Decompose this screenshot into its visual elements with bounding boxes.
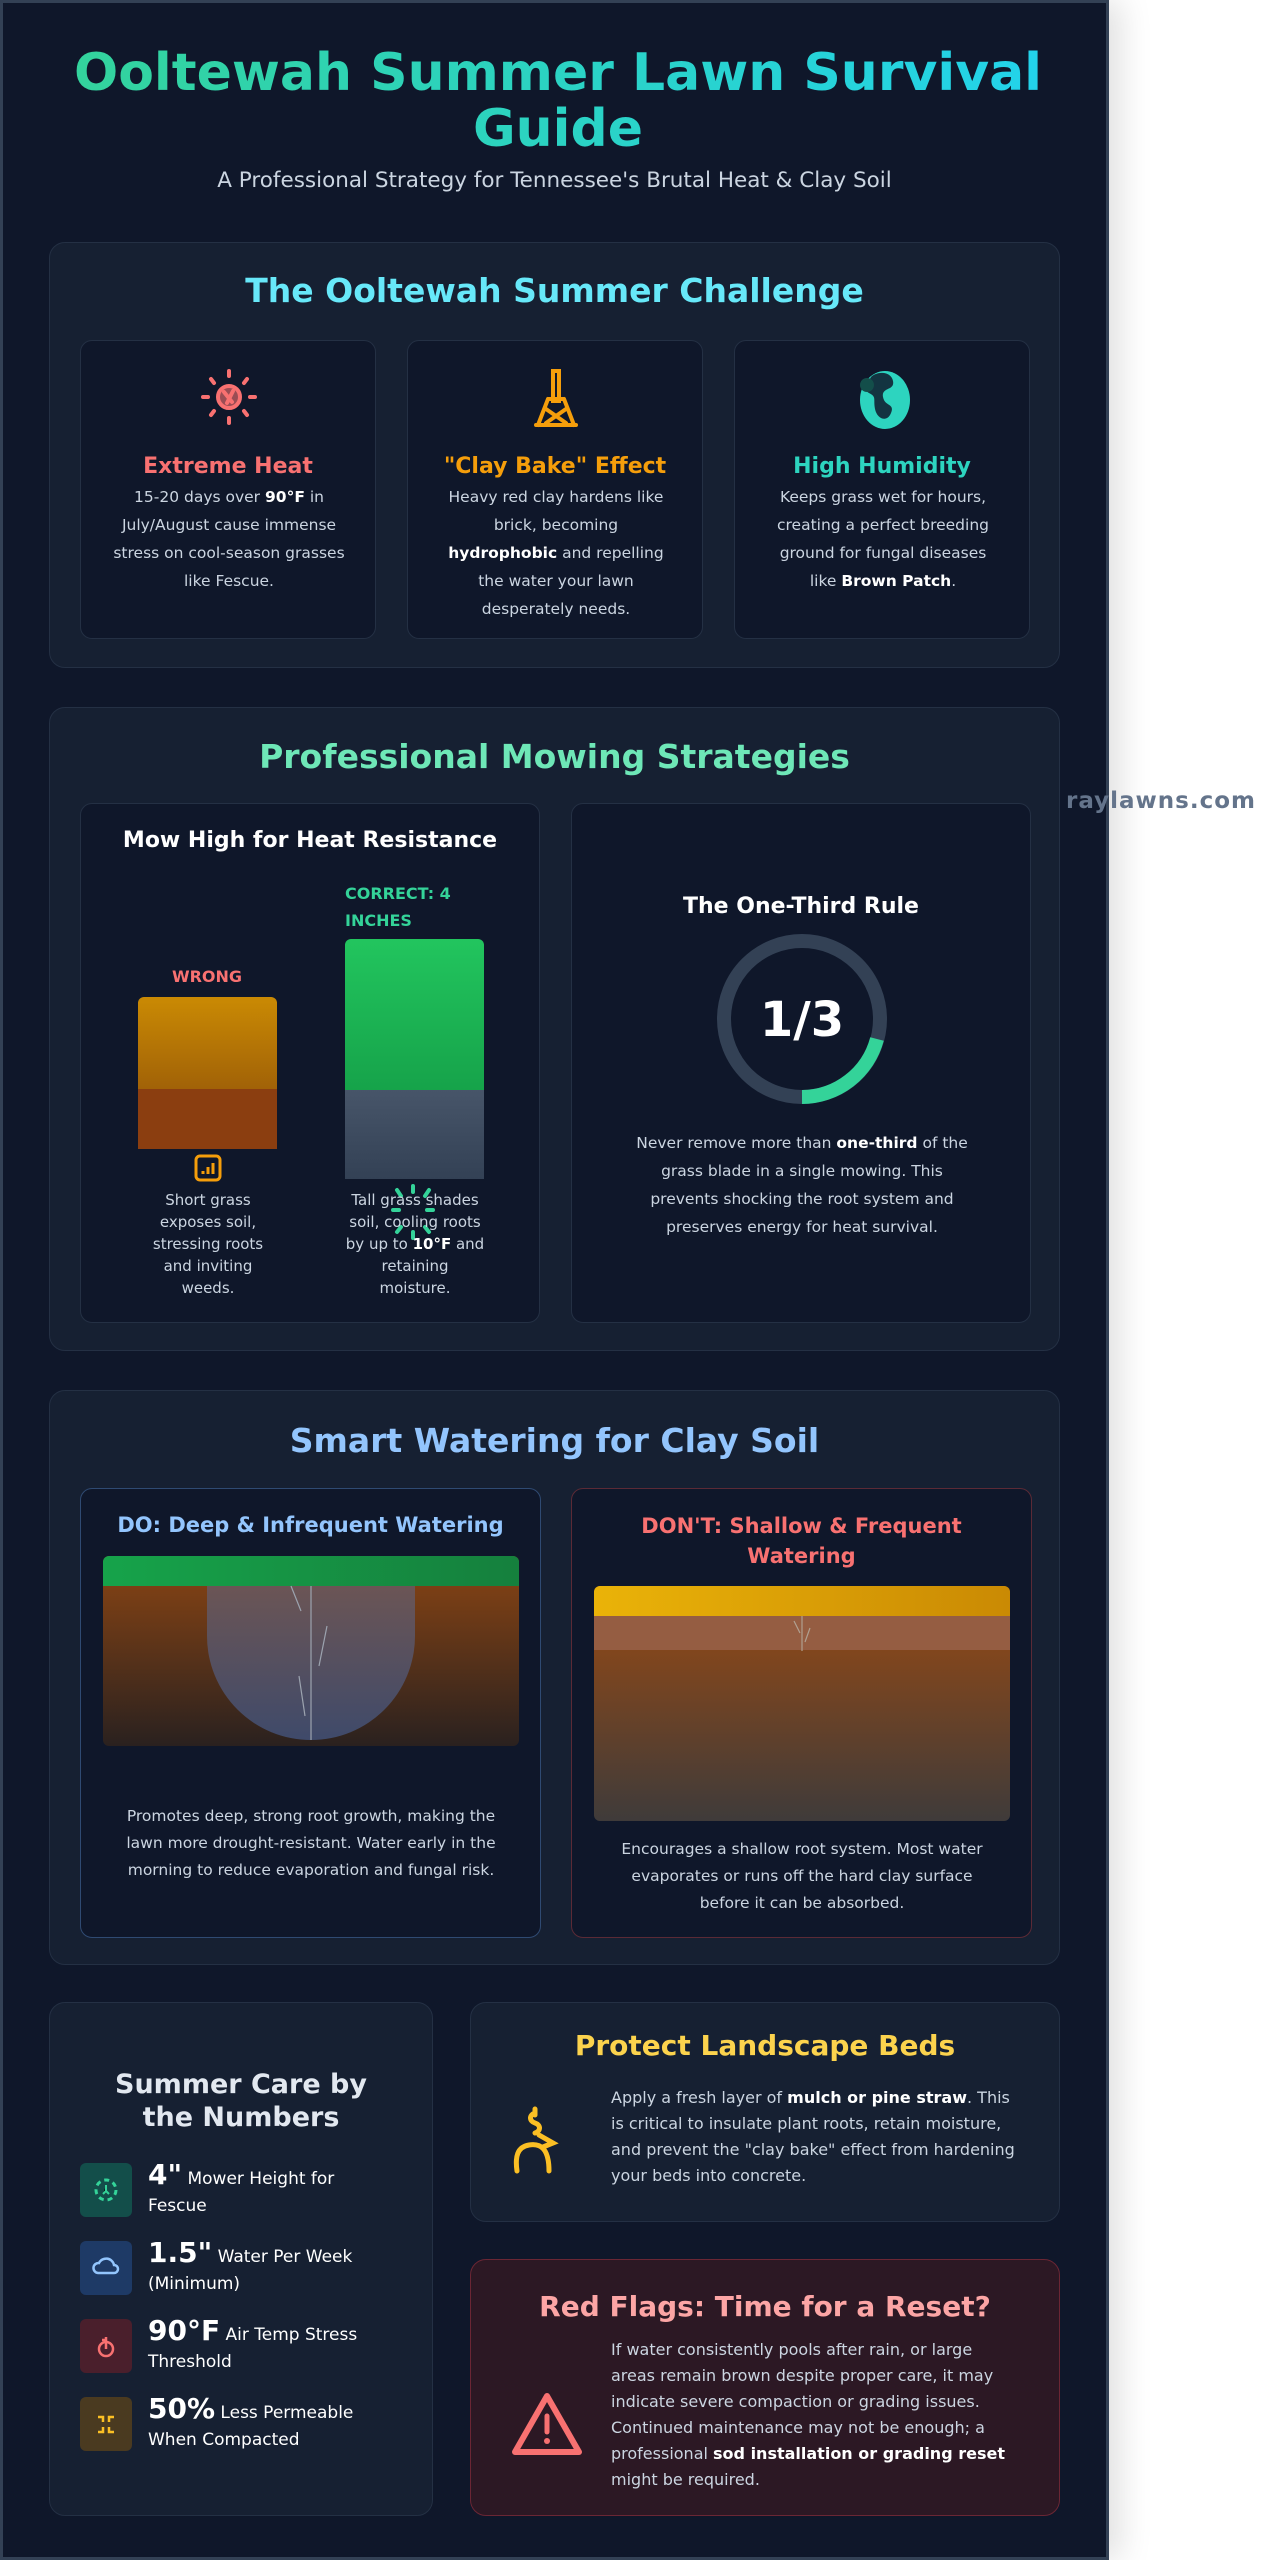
- icon: mower: [80, 2163, 132, 2217]
- stat text: 90°F Air Temp Stress Threshold: [148, 2314, 357, 2372]
- stat text: 1.5" Water Per Week (Minimum): [148, 2236, 352, 2294]
- card: extreme heat: [80, 340, 376, 639]
- icon: cooling spinner: [391, 1184, 435, 1240]
- card title: The One-Third Rule: [683, 894, 919, 919]
- text: one third: Never remove more than one-third of the grass blade in a single mowing. This prevents shocking the root system and preserves energy for heat survival.: [636, 1134, 968, 1236]
- title: Ooltewah Summer Lawn Survival Guide: [74, 43, 1042, 159]
- donut chart: [717, 934, 887, 1104]
- stat text: 50% Less Permeable When Compacted: [148, 2392, 353, 2450]
- stat text: 4" Mower Height for Fescue: [148, 2158, 334, 2216]
- card: clay bake: [407, 340, 703, 639]
- card title: DO: Deep & Infrequent Watering: [117, 1513, 504, 1537]
- panel: numbers: [49, 2002, 433, 2516]
- panel: protect beds: [470, 2002, 1060, 2222]
- text: dont: Encourages a shallow root system. Most water evaporates or runs off the hard clay surface before it can be absorbed.: [621, 1840, 983, 1912]
- text: do: Promotes deep, strong root growth, making the lawn more drought-resistant. Water early in the morning to reduce evaporation and fungal risk.: [126, 1807, 496, 1879]
- icon: globe: [860, 371, 910, 429]
- label: correct: CORRECT: 4 INCHES: [345, 884, 451, 930]
- card title: High Humidity: [793, 454, 971, 479]
- heading: numbers: Summer Care by: [115, 2069, 367, 2100]
- stat: temp: [80, 2314, 357, 2373]
- card: dont: [571, 1488, 1032, 1938]
- heading: challenge: The Ooltewah Summer Challenge: [245, 271, 864, 310]
- bar: tall grass: [345, 939, 484, 1179]
- card title: DON'T: Shallow & Frequent Watering: [641, 1514, 962, 1568]
- card text: 15-20 days over 90°F in July/August cause immense stress on cool-season grasses like Fescue.: [113, 488, 345, 590]
- watermark: raylawns.com: [1066, 788, 1256, 814]
- heading: protect: Protect Landscape Beds: [575, 2029, 955, 2062]
- panel: red flags: [470, 2259, 1060, 2516]
- card text: Heavy red clay hardens like brick, becoming hydrophobic and repelling the water your lawn desperately needs.: [448, 488, 664, 618]
- text: protect: Apply a fresh layer of mulch or pine straw. This is critical to insulate plant roots, retain moisture, and prevent the "clay bake" effect from hardening your beds into concrete.: [611, 2088, 1015, 2185]
- panel: mowing: [49, 707, 1060, 1351]
- text: red flags: If water consistently pools after rain, or large areas remain brown despite proper care, it may indicate severe compaction or grading issues. Continued maintenance may not be enough; a professional sod installation or grading reset might be required.: [611, 2340, 1005, 2489]
- card: humidity: [734, 340, 1030, 639]
- heading: red flags: Red Flags: Time for a Reset?: [539, 2290, 991, 2323]
- icon: chart: [194, 1154, 222, 1182]
- card title: Extreme Heat: [143, 454, 313, 479]
- heading: mowing: Professional Mowing Strategies: [259, 737, 850, 776]
- card title: Mow High for Heat Resistance: [123, 828, 497, 853]
- icon: tower: [534, 369, 578, 428]
- text: tall: Tall grass shades soil, cooling roots by up to 10°F and retaining moisture.: [346, 1191, 484, 1297]
- card: do: [80, 1488, 541, 1938]
- icon: sun: [201, 369, 257, 425]
- heading: numbers: the Numbers: [143, 2102, 339, 2133]
- icon: plant: [514, 2106, 559, 2174]
- bar: short grass: [138, 997, 277, 1149]
- icon: cloud: [80, 2241, 132, 2295]
- icon: warning: [512, 2393, 582, 2455]
- panel: summer challenge: [49, 242, 1060, 668]
- card text: Keeps grass wet for hours, creating a perfect breeding ground for fungal diseases like Brown Patch.: [777, 488, 989, 590]
- heading: watering: Smart Watering for Clay Soil: [290, 1421, 819, 1460]
- donut chart: 1/3: [760, 992, 844, 1048]
- panel: watering: [49, 1390, 1060, 1965]
- card: mow high: [80, 803, 540, 1323]
- icon: compress: [80, 2397, 132, 2451]
- icon: thermometer: [80, 2319, 132, 2373]
- card: one third: [571, 803, 1031, 1323]
- stat: mower height: [80, 2158, 334, 2217]
- stat: water: [80, 2236, 352, 2295]
- illustration: shallow roots: [594, 1586, 1010, 1821]
- heading: numbers: [115, 2069, 367, 2133]
- label: wrong: WRONG: [172, 967, 242, 986]
- card title: "Clay Bake" Effect: [444, 454, 666, 479]
- illustration: deep roots: [103, 1556, 519, 1746]
- subtitle: A Professional Strategy for Tennessee's Brutal Heat & Clay Soil: [217, 168, 892, 193]
- stat: permeable: [80, 2392, 353, 2451]
- text: short: Short grass exposes soil, stressing roots and inviting weeds.: [153, 1191, 263, 1297]
